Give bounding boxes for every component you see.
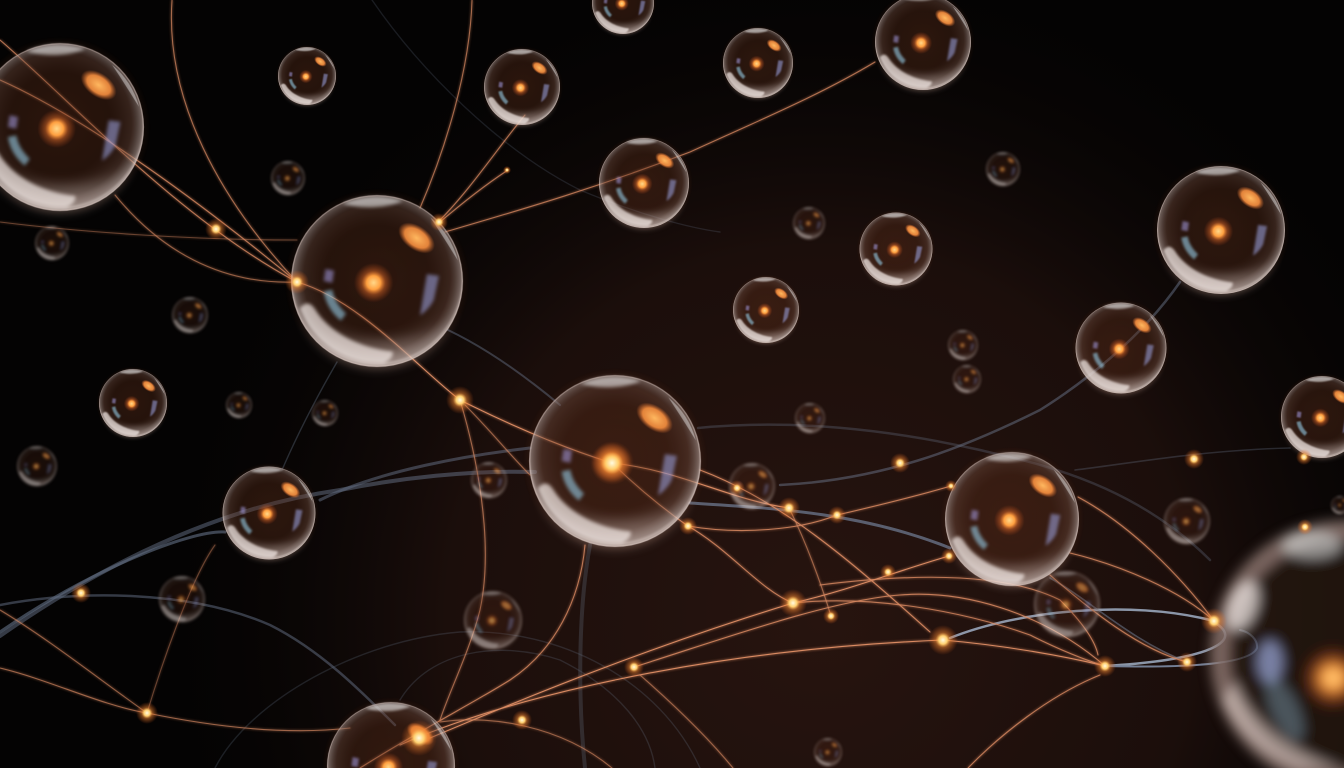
foreground blurred bubble: [1215, 525, 1344, 768]
background: [322, 122, 1308, 768]
large bubbles: [0, 36, 1084, 591]
glowing nodes: [71, 166, 1313, 756]
far small bubbles: [15, 151, 1344, 767]
